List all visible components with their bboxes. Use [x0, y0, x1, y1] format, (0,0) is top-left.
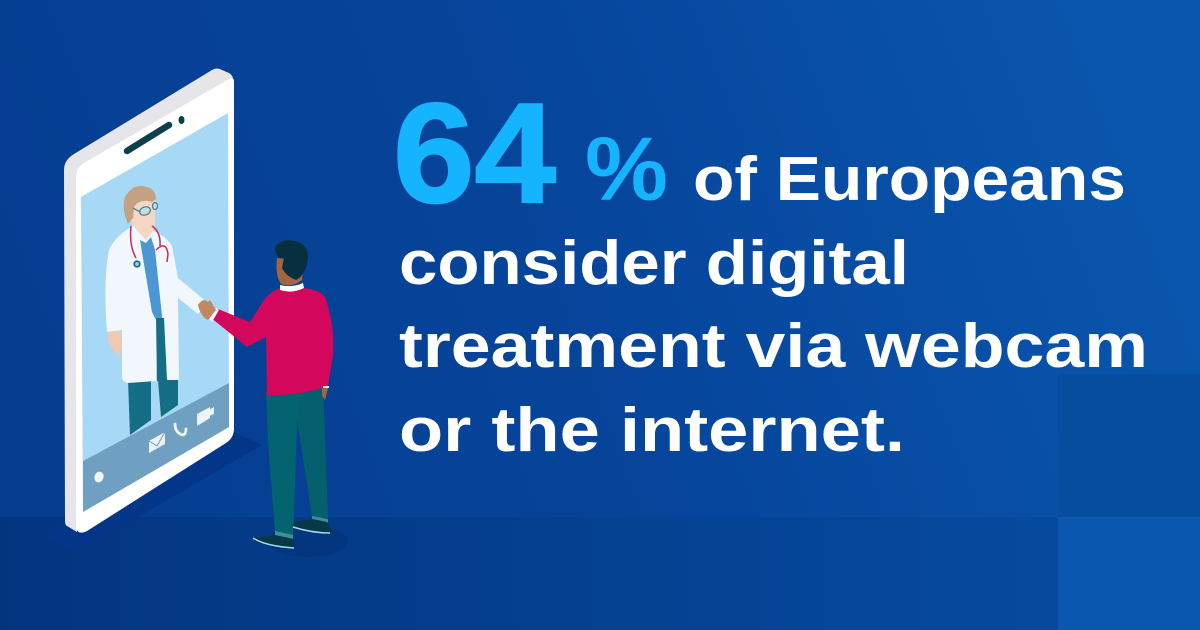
doctor glasses [133, 202, 158, 217]
person left leg [266, 392, 300, 537]
person right leg [295, 386, 328, 518]
doctor hair [124, 186, 156, 224]
doctor coat gap [156, 318, 167, 381]
phone side edge [64, 68, 233, 532]
doctor [105, 186, 208, 435]
headline text: consider digital [399, 229, 909, 298]
toolbar icon: video [197, 407, 214, 426]
statistic: 64 % [393, 74, 668, 233]
headline text: or the internet. [399, 396, 905, 465]
doctor coat [105, 226, 208, 383]
phone screen [81, 113, 229, 512]
doctor head [128, 188, 155, 234]
toolbar icon: home button [93, 470, 105, 484]
person sweater [210, 288, 333, 395]
person shadow [268, 525, 348, 557]
person right hand [322, 388, 328, 400]
phone speaker [127, 125, 169, 151]
phone front face [76, 78, 234, 533]
doctor neck [134, 226, 154, 244]
person collar [280, 283, 304, 292]
statistic: 64 %: 64 [393, 74, 556, 233]
icon: smartphone [64, 68, 234, 533]
phone camera [178, 116, 184, 124]
doctor stethoscope [131, 226, 168, 262]
statistic: 64 %: % [585, 120, 668, 220]
person cuffs [275, 531, 293, 539]
headline [393, 74, 1148, 465]
phone shadow [47, 432, 262, 552]
toolbar icon: phone [175, 424, 186, 435]
headline text: of Europeans [693, 145, 1126, 214]
phone toolbar [83, 383, 229, 512]
doctor left hand [108, 331, 122, 357]
person shoes [253, 535, 294, 548]
person hair [275, 240, 308, 280]
toolbar icon: envelope [149, 432, 165, 453]
doctor shirt and tie [140, 237, 163, 325]
person cuff [209, 308, 219, 322]
doctor legs [128, 380, 151, 435]
headline text: treatment via webcam [399, 312, 1148, 381]
person [198, 240, 333, 548]
person neck [276, 258, 304, 285]
handshake hands [198, 300, 216, 320]
headline text [399, 145, 1148, 465]
